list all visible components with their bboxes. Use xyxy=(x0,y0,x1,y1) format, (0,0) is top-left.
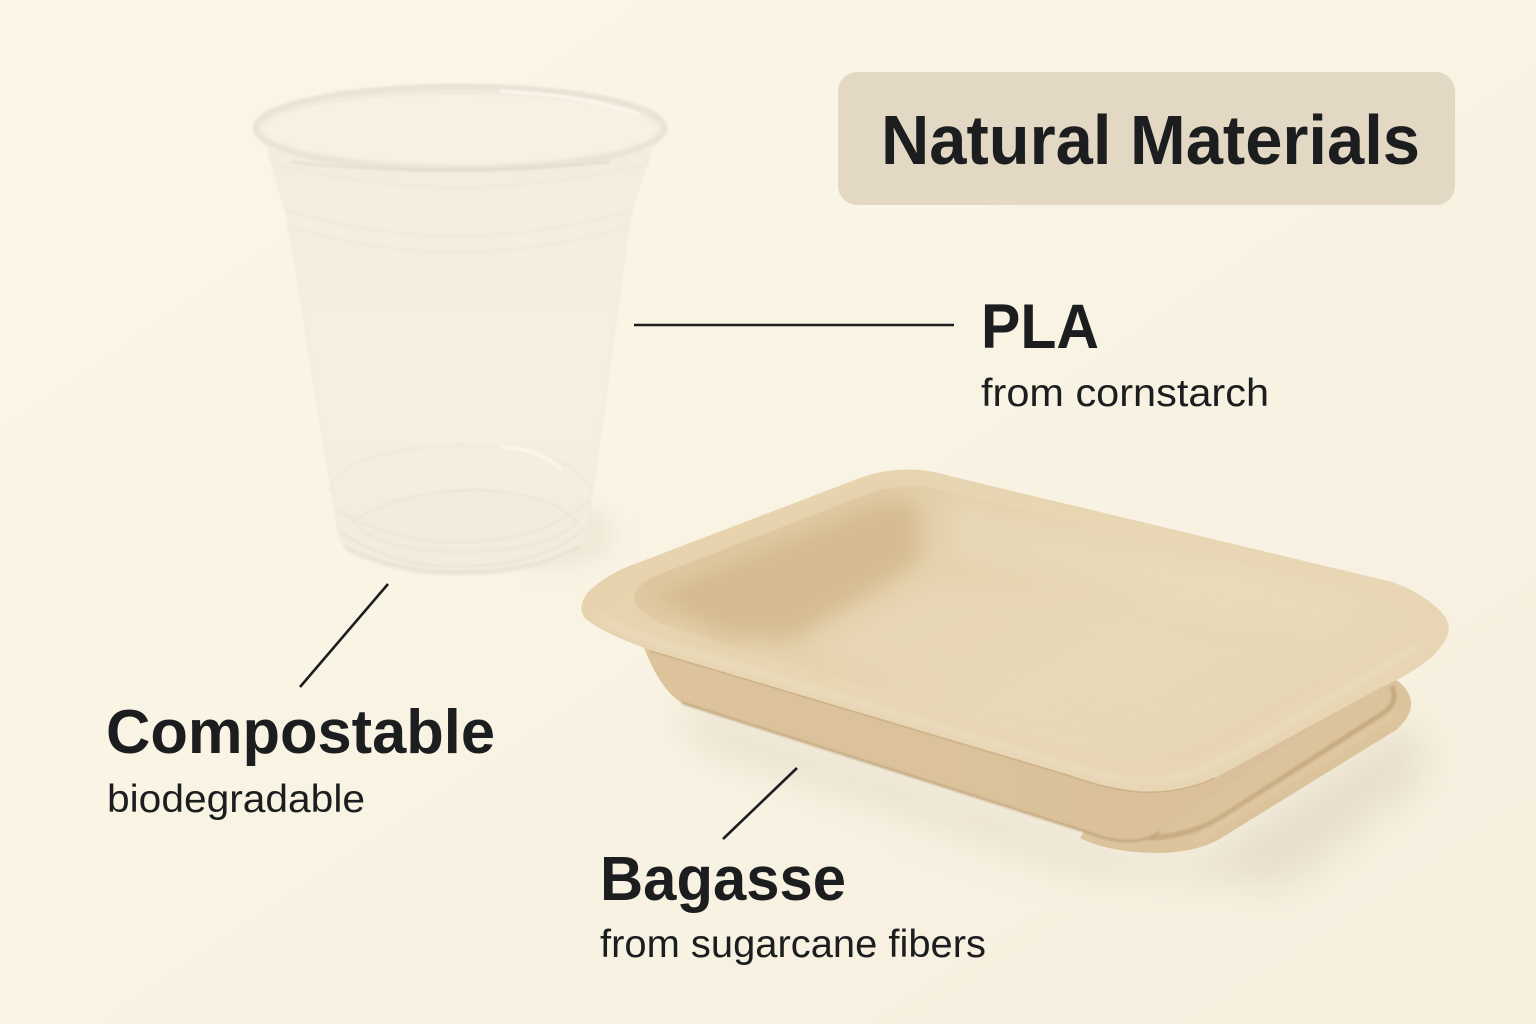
tray wall xyxy=(643,640,1390,841)
cup shadow xyxy=(495,501,615,569)
tray shadow xyxy=(670,700,1430,885)
title badge xyxy=(838,72,1455,205)
tray floor shading xyxy=(650,501,921,640)
leader line: Bagasse xyxy=(723,768,797,839)
callout: PLA xyxy=(634,292,1269,415)
callout: Bagasse xyxy=(600,768,986,966)
lower tray xyxy=(1080,672,1411,853)
label: Compostable: Compostable xyxy=(106,698,495,767)
tray xyxy=(581,469,1449,885)
title: Natural Materials xyxy=(881,101,1420,179)
leader line: PLA xyxy=(634,324,954,326)
leader line: Compostable xyxy=(300,584,388,687)
cup xyxy=(256,87,664,575)
cup lower rings xyxy=(330,445,590,572)
tray rim highlights xyxy=(600,617,1420,780)
label: Bagasse: Bagasse xyxy=(600,845,846,914)
sublabel: biodegradable: biodegradable xyxy=(107,778,365,821)
cup upper ridges xyxy=(272,163,650,252)
callout: Compostable xyxy=(106,584,495,821)
tray interior xyxy=(634,486,1402,757)
sublabel: from cornstarch: from cornstarch xyxy=(981,372,1269,415)
tray rim xyxy=(581,469,1449,792)
sublabel: from sugarcane fibers: from sugarcane fibers xyxy=(600,923,986,966)
cup rim xyxy=(256,87,664,169)
cup body xyxy=(268,150,651,575)
label: PLA: PLA xyxy=(981,292,1099,362)
